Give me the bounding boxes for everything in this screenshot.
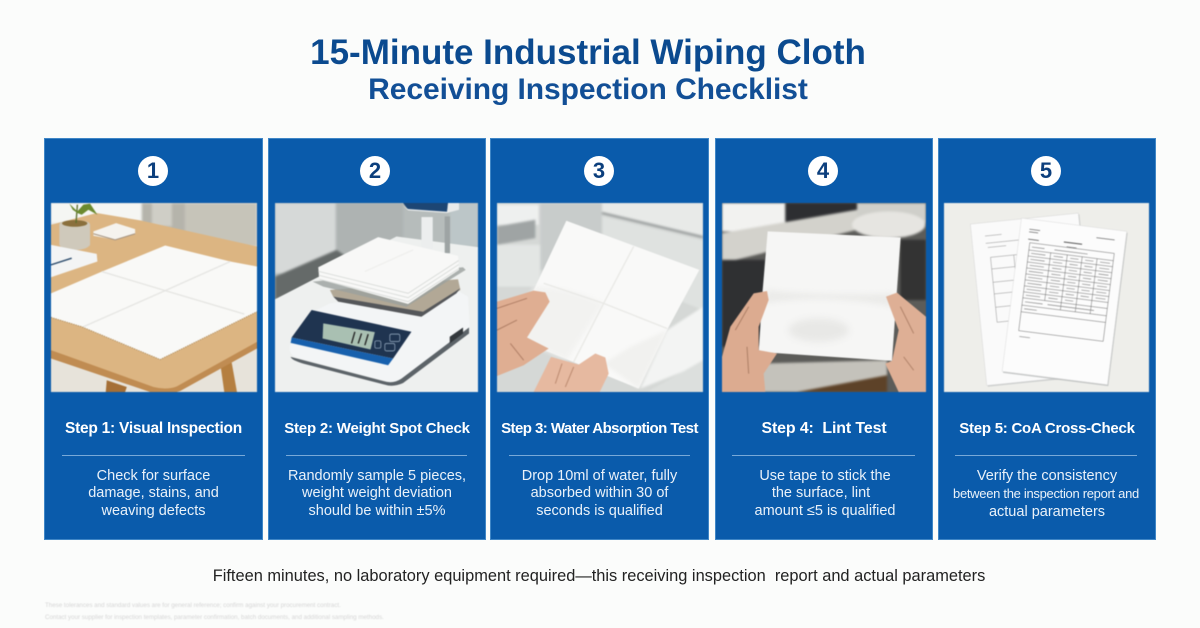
- step description: between the inspection report and: [953, 486, 1139, 501]
- step description: Verify the consistency: [977, 468, 1117, 484]
- subtitle: Receiving Inspection Checklist: [368, 73, 808, 106]
- scale body: [290, 290, 470, 382]
- photo: hands stretching cloth: [721, 202, 927, 393]
- step description: Check for surface: [97, 468, 210, 484]
- step heading: Step 1: Visual Inspection: [65, 420, 242, 437]
- number badge 1: 1: [147, 158, 159, 183]
- step description: [288, 468, 466, 519]
- step description: [953, 468, 1139, 520]
- front sheet: [1002, 218, 1128, 386]
- step heading: Step 2: Weight Spot Check: [284, 420, 470, 437]
- step description: Randomly sample 5 pieces,: [288, 468, 466, 484]
- left hand: [497, 291, 550, 376]
- step description: damage, stains, and: [88, 485, 219, 501]
- step heading: Step 5: CoA Cross-Check: [959, 420, 1135, 437]
- photo: cloth on wooden table: [50, 202, 258, 393]
- step description: [522, 468, 678, 519]
- pan: [330, 279, 460, 313]
- number badge 3: 3: [593, 158, 605, 183]
- step heading: Step 3: Water Absorption Test: [501, 420, 698, 437]
- number badge 3: [584, 156, 614, 186]
- step description: amount ≤5 is qualified: [755, 503, 895, 519]
- photo: inspection report documents: [943, 202, 1150, 393]
- number badge 1: [138, 156, 168, 186]
- panel: step 5 coa cross-check: [938, 138, 1156, 540]
- white tray: [93, 223, 135, 240]
- panel: step 2 weight spot check: [268, 138, 486, 540]
- step description: [88, 468, 219, 519]
- step description: [755, 468, 895, 519]
- stack: [318, 237, 459, 304]
- step description: absorbed within 30 of: [531, 485, 668, 501]
- number badge 2: [360, 156, 390, 186]
- panel: step 1 visual inspection: [44, 138, 263, 540]
- footer summary: Fifteen minutes, no laboratory equipment required—this receiving inspection report and actual parameters: [213, 567, 985, 585]
- step description: should be within ±5%: [309, 503, 445, 519]
- panel: step 3 water absorption test: [490, 138, 709, 540]
- left hand: [722, 291, 777, 392]
- cloth: [51, 245, 257, 360]
- photo: stack of cloths on scale: [274, 202, 479, 393]
- step description: Drop 10ml of water, fully: [522, 468, 677, 484]
- number badge 4: 4: [817, 158, 829, 183]
- panel: step 4 lint test: [715, 138, 933, 540]
- number badge 5: 5: [1040, 158, 1052, 183]
- plant: [59, 220, 90, 250]
- fine print: These tolerances and standard values are for general reference; confirm against your procurement contract.: [45, 602, 341, 609]
- step heading: Step 4: Lint Test: [761, 420, 887, 437]
- step description: actual parameters: [989, 504, 1105, 520]
- book: [51, 245, 97, 277]
- step description: weaving defects: [102, 503, 205, 519]
- number badge 5: [1031, 156, 1061, 186]
- step description: Use tape to stick the: [759, 468, 891, 484]
- fine print: Contact your supplier for inspection templates, parameter confirmation, batch documents, and additional sampling methods.: [45, 614, 384, 621]
- right hand: [534, 354, 609, 392]
- step description: the surface, lint: [772, 485, 870, 501]
- cloth: [513, 221, 699, 389]
- cloth: [759, 231, 901, 361]
- number badge 2: 2: [369, 158, 381, 183]
- title: 15-Minute Industrial Wiping Cloth: [310, 33, 866, 72]
- right hand: [885, 293, 926, 392]
- stand: [421, 217, 433, 249]
- fine print: [45, 602, 384, 621]
- photo: hands holding unfolded cloth: [496, 202, 704, 393]
- back sheet: [970, 213, 1096, 387]
- step description: weight weight deviation: [302, 485, 452, 501]
- step description: seconds is qualified: [536, 503, 663, 519]
- number badge 4: [808, 156, 838, 186]
